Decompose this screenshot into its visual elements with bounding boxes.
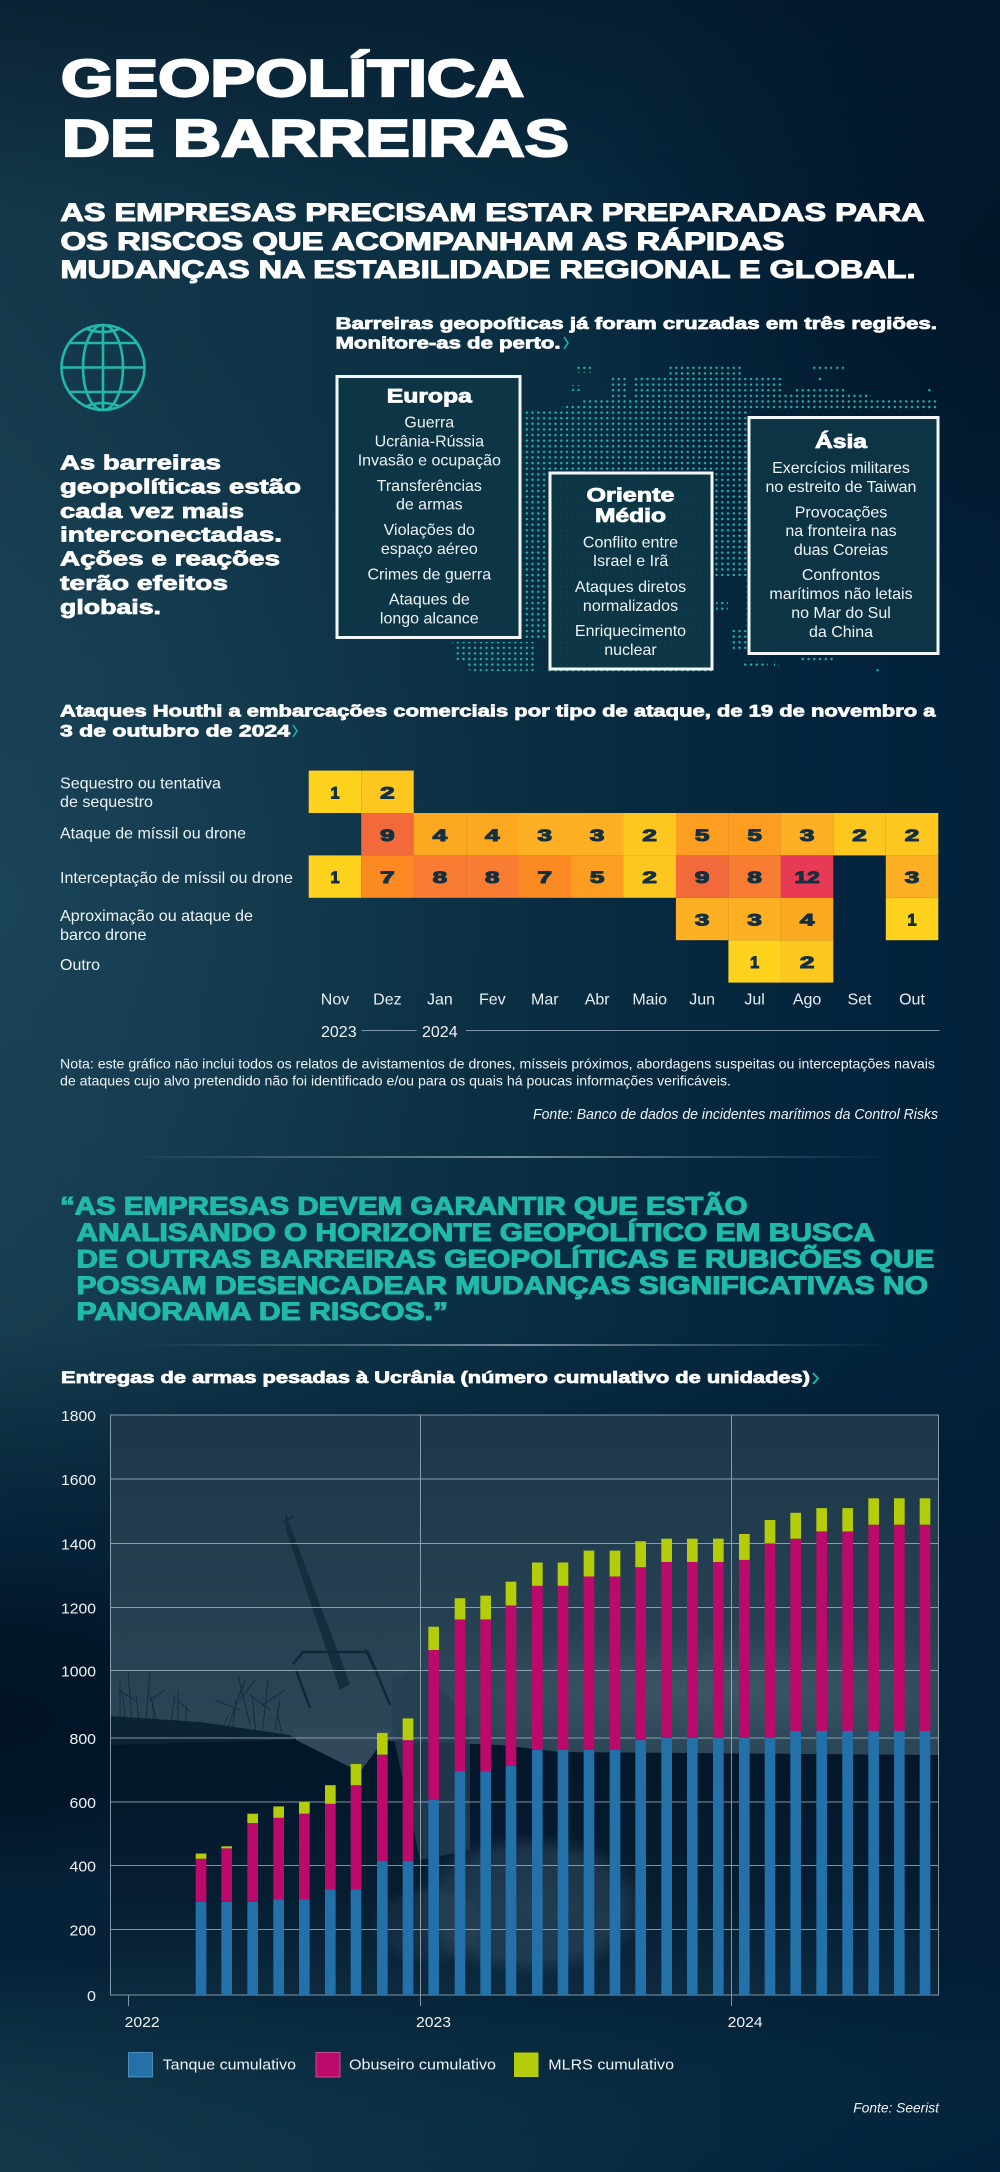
row: outro <box>728 940 833 983</box>
stacked bars <box>196 1498 930 1995</box>
panel: Oriente Médio: Ataques diretos <box>575 579 686 596</box>
panel: Oriente Médio: nuclear <box>604 642 657 659</box>
chart y axis labels: 600 <box>70 1795 96 1812</box>
row: sequestro <box>309 771 414 813</box>
heading: Houthi attacks <box>60 703 937 741</box>
quote <box>60 1190 934 1326</box>
panel: Oriente Médio: Israel e Irã <box>593 553 668 570</box>
panel: Oriente Médio: Médio <box>595 506 666 527</box>
panel: Europa: Ucrânia-Rússia <box>375 434 484 451</box>
panel: Ásia: da China <box>809 624 873 641</box>
heading: Houthi attacks: 3 de outubro de 2024 <box>60 723 291 741</box>
panel: Oriente Médio: Oriente <box>586 486 674 507</box>
text: interconnected barriers: interconectadas. <box>60 524 282 546</box>
series: obuseiro cumulativo <box>196 1525 930 1902</box>
heatmap row labels: Interceptação de míssil ou drone <box>60 870 293 887</box>
legend: Obuseiro cumulativo <box>349 2056 496 2074</box>
chart y axis labels: 200 <box>70 1922 96 1940</box>
note: de ataques cujo alvo pretendido não foi identificado e/ou para os quais há poucas informações verificáveis. <box>60 1072 731 1088</box>
panel: Ásia: duas Coreias <box>794 542 888 559</box>
chart y axis labels: 0 <box>87 1988 96 2005</box>
row: ataque de míssil: 2 <box>642 826 657 845</box>
heading: three regions <box>336 315 937 352</box>
panel: Europa <box>337 376 520 638</box>
chart gridlines <box>110 1415 939 2006</box>
panel: Ásia: Provocações <box>795 504 887 521</box>
row: interceptação: 12 <box>795 868 820 887</box>
row: ataque de míssil: 2 <box>852 826 867 845</box>
row: aproximação: 4 <box>800 911 815 930</box>
chart y axis labels: 400 <box>70 1858 96 1876</box>
panel: Oriente Médio <box>550 473 712 669</box>
text: interconnected barriers: Ações e reações <box>60 548 280 570</box>
heatmap row labels: Aproximação ou ataque de <box>60 908 253 925</box>
heatmap row labels: barco drone <box>60 927 147 944</box>
panel: Europa: Violações do <box>384 522 475 539</box>
row: ataque de míssil <box>361 813 938 855</box>
chart y axis labels: 1000 <box>61 1664 96 1680</box>
panel: Ásia <box>749 418 938 654</box>
heatmap month axis: Jun <box>689 992 715 1008</box>
heatmap month axis: Jan <box>427 992 453 1008</box>
panel: Ásia: no estreito de Taiwan <box>766 479 916 496</box>
heatmap row labels: Sequestro ou tentativa <box>60 776 221 792</box>
heatmap cells <box>309 771 938 983</box>
heatmap row labels: de sequestro <box>60 794 153 811</box>
row: interceptação: 7 <box>380 868 395 887</box>
row: aproximação: 1 <box>908 911 916 930</box>
quote: ANALISANDO O HORIZONTE GEOPOLÍTICO EM BUSCA <box>76 1218 875 1247</box>
heatmap month axis: Maio <box>632 992 667 1008</box>
panel: Europa: Ataques de <box>389 592 470 609</box>
chart y axis labels: 1400 <box>61 1536 96 1554</box>
heatmap month axis: Abr <box>585 992 610 1008</box>
chart x axis labels: 2022 <box>125 2014 160 2031</box>
heading: Houthi attacks: Ataques Houthi a embarcações comerciais por tipo de ataque, de 19 de novembro a <box>60 703 937 721</box>
quote: “AS EMPRESAS DEVEM GARANTIR QUE ESTÃO <box>60 1190 748 1220</box>
row: outro: 2 <box>800 953 814 972</box>
chart x axis labels <box>125 2014 763 2031</box>
row: sequestro: 2 <box>380 783 395 802</box>
quote: POSSAM DESENCADEAR MUDANÇAS SIGNIFICATIVAS NO <box>76 1272 928 1300</box>
series: tanque cumulativo <box>196 1731 930 1995</box>
legend: MLRS cumulativo <box>548 2056 674 2074</box>
row: interceptação: 5 <box>590 868 604 887</box>
panel: Europa: longo alcance <box>380 610 479 628</box>
row: aproximação: 3 <box>747 911 762 930</box>
row: ataque de míssil: 5 <box>695 826 709 845</box>
chart x axis labels: 2024 <box>728 2014 763 2031</box>
panel: Ásia: na fronteira nas <box>785 523 897 540</box>
row: interceptação: 8 <box>485 868 500 887</box>
text: interconnected barriers: cada vez mais <box>60 501 244 523</box>
row: sequestro: 1 <box>330 783 340 802</box>
row: interceptação: 3 <box>905 868 919 887</box>
row: interceptação <box>309 855 938 898</box>
row: ataque de míssil: 3 <box>800 826 814 845</box>
panel: Ásia: Ásia <box>815 431 868 453</box>
text: interconnected barriers <box>60 452 301 619</box>
heatmap month axis: Dez <box>373 992 402 1008</box>
heatmap row labels <box>60 776 293 974</box>
subtitle: MUDANÇAS NA ESTABILIDADE REGIONAL E GLOBAL. <box>60 256 915 284</box>
source: Seerist: Fonte: Seerist <box>853 2100 940 2116</box>
heatmap month axis: Jul <box>744 992 765 1008</box>
note: Nota: este gráfico não inclui todos os relatos de avistamentos de drones, mísseis próximos, abordagens suspeitas ou interceptações navais <box>60 1055 935 1071</box>
chart y axis labels: 1200 <box>61 1600 96 1618</box>
heatmap month axis: Mar <box>531 992 559 1008</box>
chart y axis labels <box>61 1408 96 2005</box>
title: GEOPOLÍTICA <box>61 50 524 108</box>
row: ataque de míssil: 5 <box>747 826 762 845</box>
panel: Europa: Crimes de guerra <box>367 566 491 584</box>
heatmap row labels: Ataque de míssil ou drone <box>60 826 246 842</box>
series: MLRS cumulativo <box>196 1498 930 1859</box>
legend: Tanque cumulativo <box>163 2056 296 2074</box>
chart x axis labels: 2023 <box>416 2014 451 2031</box>
panel: Ásia: Confrontos <box>802 567 880 584</box>
heading: three regions: Monitore-as de perto. <box>336 334 560 352</box>
note <box>60 1055 935 1088</box>
row: ataque de míssil: 3 <box>538 826 552 845</box>
chart y axis labels: 1600 <box>61 1472 96 1489</box>
heading: three regions: Barreiras geopoíticas já foram cruzadas em três regiões. <box>336 315 937 333</box>
panel: Oriente Médio: normalizados <box>583 598 678 615</box>
quote: PANORAMA DE RISCOS.” <box>76 1298 448 1326</box>
heatmap year axis: 2024 <box>422 1024 458 1041</box>
text: interconnected barriers: geopolíticas estão <box>60 476 301 498</box>
chart y axis labels: 1800 <box>61 1408 96 1425</box>
row: ataque de míssil: 9 <box>380 826 395 845</box>
icon: globe <box>62 325 144 410</box>
panel: Oriente Médio: Conflito entre <box>583 534 678 551</box>
legend <box>128 2052 674 2077</box>
panel: Europa: Europa <box>387 387 472 408</box>
row: ataque de míssil: 3 <box>590 826 604 845</box>
row: ataque de míssil: 2 <box>905 826 919 845</box>
heatmap year axis: 2023 <box>321 1024 357 1041</box>
row: interceptação: 9 <box>695 868 709 887</box>
panel: Oriente Médio: Enriquecimento <box>575 623 686 640</box>
heatmap month axis <box>321 992 925 1008</box>
text: interconnected barriers: terão efeitos <box>60 573 228 595</box>
panel: Ásia: marítimos não letais <box>769 586 913 603</box>
text: interconnected barriers: As barreiras <box>60 452 221 474</box>
chart y axis labels: 800 <box>70 1731 96 1748</box>
row: interceptação: 8 <box>433 868 447 887</box>
heatmap month axis: Fev <box>479 992 506 1008</box>
subtitle: OS RISCOS QUE ACOMPANHAM AS RÁPIDAS <box>60 227 784 256</box>
row: aproximação <box>676 898 938 940</box>
text: interconnected barriers: globais. <box>60 597 161 619</box>
heatmap month axis: Set <box>847 992 872 1008</box>
panel: Ásia: Exercícios militares <box>772 460 910 477</box>
panel: Europa: Guerra <box>404 415 454 432</box>
panel: Europa: de armas <box>396 496 463 514</box>
row: ataque de míssil: 4 <box>433 826 448 845</box>
title <box>61 50 569 168</box>
heatmap month axis: Out <box>899 992 925 1008</box>
row: interceptação: 7 <box>538 868 552 887</box>
row: interceptação: 8 <box>747 868 762 887</box>
row: ataque de míssil: 4 <box>485 826 500 845</box>
row: aproximação: 3 <box>695 911 709 930</box>
subtitle: AS EMPRESAS PRECISAM ESTAR PREPARADAS PARA <box>60 199 924 227</box>
subtitle <box>60 199 924 284</box>
panel: Europa: Invasão e ocupação <box>358 452 501 470</box>
panel: Europa: espaço aéreo <box>381 541 478 558</box>
title: DE BARREIRAS <box>62 110 569 168</box>
source: Control Risks: Fonte: Banco de dados de incidentes marítimos da Control Risks <box>533 1107 938 1123</box>
heatmap month axis: Nov <box>321 992 349 1008</box>
row: interceptação: 1 <box>330 868 340 887</box>
row: outro: 1 <box>750 953 759 972</box>
heatmap row labels: Outro <box>60 957 100 974</box>
panel: Ásia: no Mar do Sul <box>791 605 891 622</box>
heading: weapons deliveries: Entregas de armas pesadas à Ucrânia (número cumulativo de unidades) <box>61 1369 810 1387</box>
dotted world map <box>452 364 937 673</box>
row: interceptação: 2 <box>642 868 657 887</box>
panel: Europa: Transferências <box>377 478 482 495</box>
heatmap month axis: Ago <box>793 992 821 1008</box>
quote: DE OUTRAS BARREIRAS GEOPOLÍTICAS E RUBICÕES QUE <box>76 1244 934 1274</box>
heatmap year axis <box>321 1024 940 1041</box>
chart background photo: rocket launch <box>110 1415 1000 1995</box>
